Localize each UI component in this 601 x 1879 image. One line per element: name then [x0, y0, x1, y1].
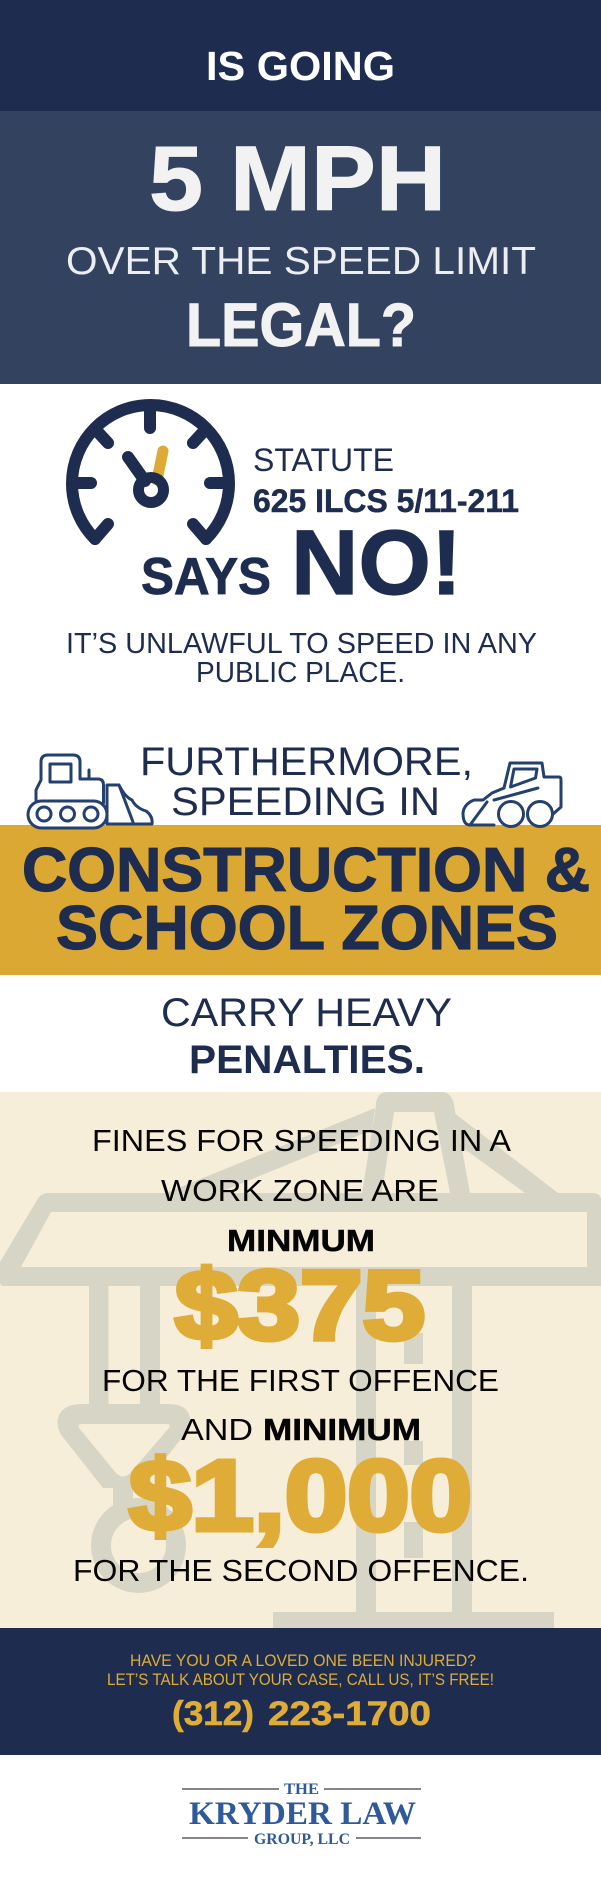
logo: kryder law group: KRYDER LAW [189, 1796, 416, 1832]
subheading: over the speed limit: OVER THE SPEED LIMIT [66, 240, 536, 283]
icon: speedometer [72, 405, 229, 539]
text: carry heavy penalties: PENALTIES. [189, 1038, 425, 1082]
header band: is going: IS GOING [206, 43, 395, 89]
text: statute reference [253, 442, 519, 519]
text: fines for speeding in a work zone: FINES FOR SPEEDING IN A [92, 1123, 511, 1158]
phone number [172, 1695, 431, 1733]
banner: construction and school zones: CONSTRUCTION & [22, 836, 590, 905]
text: first offence and minimum: FOR THE FIRST OFFENCE [102, 1363, 499, 1398]
text: second offence: FOR THE SECOND OFFENCE. [73, 1553, 529, 1588]
logo: kryder law group: THE [284, 1781, 319, 1798]
text: unlawful to speed: IT’S UNLAWFUL TO SPEED IN ANY [66, 628, 537, 660]
text: statute reference: 625 ILCS 5/11-211 [253, 483, 519, 519]
heading: legal: LEGAL? [186, 291, 416, 359]
panel: fines background [0, 1092, 601, 1629]
text: furthermore speeding in [140, 740, 473, 824]
text: first offence and minimum: AND [181, 1412, 253, 1447]
number: 1,000 dollar fine: $1,000 [129, 1440, 472, 1552]
text: unlawful to speed [66, 628, 537, 689]
text: first offence and minimum [102, 1363, 499, 1447]
logo: kryder law group: GROUP, LLC [254, 1831, 350, 1848]
text: fines for speeding in a work zone: WORK ZONE ARE [161, 1173, 439, 1208]
text: fines for speeding in a work zone: MINMUM [227, 1223, 375, 1258]
heading: says no: NO! [291, 512, 462, 614]
heading: 5 mph: 5 MPH [149, 128, 446, 230]
headline panel: 5 mph over the speed limit legal [0, 111, 601, 384]
text: unlawful to speed: PUBLIC PLACE. [196, 657, 405, 689]
text: carry heavy penalties [161, 991, 452, 1082]
phone number: 223-1700 [268, 1695, 431, 1733]
banner: construction and school zones: SCHOOL ZONES [56, 894, 558, 963]
logo: kryder law group [182, 1781, 421, 1848]
icon: skid loader [463, 763, 561, 826]
text: carry heavy penalties: CARRY HEAVY [161, 991, 452, 1035]
footer band: call to action: LET’S TALK ABOUT YOUR CASE, CALL US, IT’S FREE! [107, 1671, 494, 1689]
text: furthermore speeding in: SPEEDING IN [171, 780, 440, 824]
banner: construction and school zones [0, 825, 601, 975]
heading: says no: SAYS [141, 548, 271, 606]
text: first offence and minimum: MINIMUM [263, 1412, 421, 1447]
illustration: crane watermark [0, 1092, 601, 1629]
footer band: call to action [0, 1628, 601, 1755]
header band: is going [0, 0, 601, 111]
text: statute reference: STATUTE [253, 442, 394, 478]
text: furthermore speeding in: FURTHERMORE, [140, 740, 473, 784]
heading: says no [141, 512, 462, 614]
footer band: call to action: HAVE YOU OR A LOVED ONE BEEN INJURED? [130, 1652, 476, 1670]
phone number: (312) [172, 1695, 254, 1733]
text: fines for speeding in a work zone [92, 1123, 511, 1258]
icon: bulldozer [28, 755, 152, 828]
number: 375 dollar fine: $375 [175, 1250, 425, 1360]
